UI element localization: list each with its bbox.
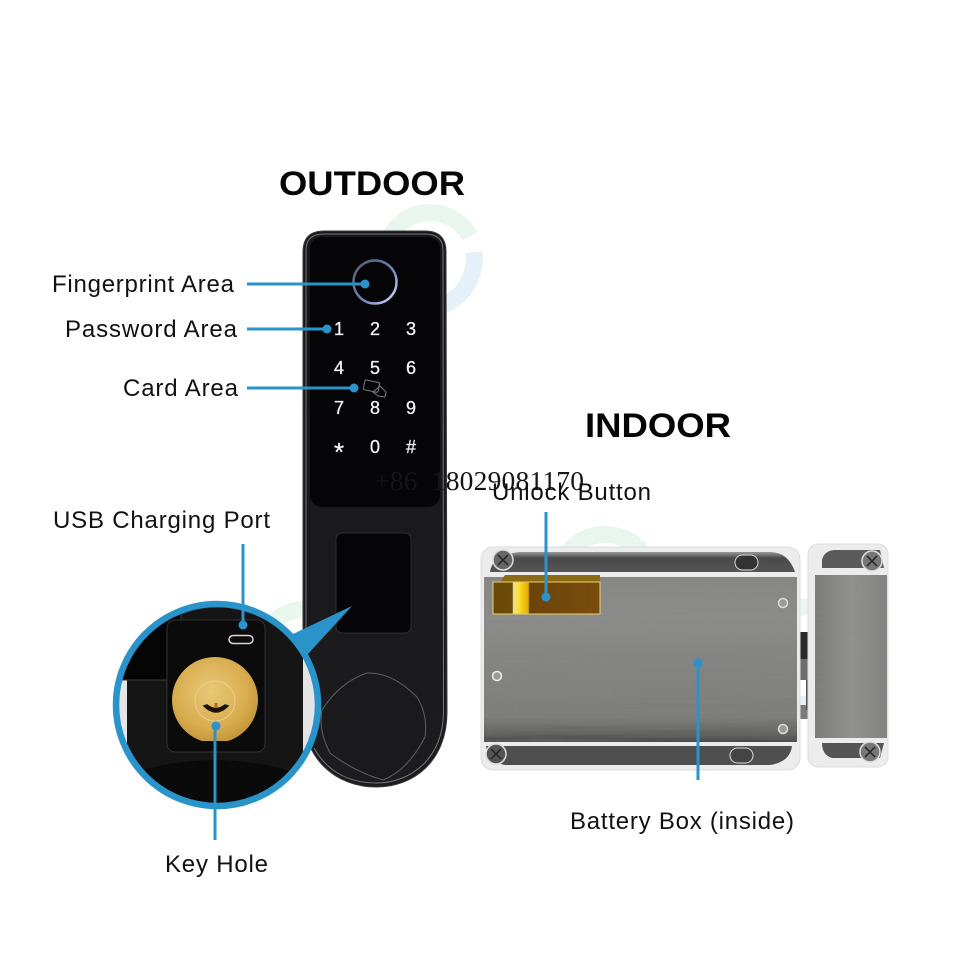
keypad digits: 9 <box>406 398 416 418</box>
callout: fingerprint area: Fingerprint Area <box>52 271 235 298</box>
outdoor handle lock <box>303 231 447 787</box>
touch panel <box>310 237 440 507</box>
keypad digits: 8 <box>370 398 380 418</box>
screws and slots <box>486 550 788 764</box>
keypad digits: 6 <box>406 358 416 378</box>
zoom callout: usb port and key hole <box>110 600 325 810</box>
brushed plate <box>484 577 797 742</box>
callout: password area: Password Area <box>65 316 238 343</box>
handle body <box>303 231 447 787</box>
key slot <box>204 705 228 712</box>
callout: card area <box>123 375 358 402</box>
keypad digits: 0 <box>370 437 380 457</box>
heading: indoor: INDOOR <box>585 407 731 445</box>
callout interior <box>119 607 315 803</box>
keypad digits: 3 <box>406 319 416 339</box>
callout: key hole <box>165 722 268 878</box>
icon: card reader <box>363 380 386 397</box>
callout: battery box: Battery Box (inside) <box>570 808 794 835</box>
fingerprint sensor ring <box>354 260 396 304</box>
zoom callout pointer <box>293 606 352 655</box>
keypad digits: 2 <box>370 319 380 339</box>
callout: password area <box>65 316 332 343</box>
keypad digits: 7 <box>334 398 344 418</box>
top strip <box>490 552 795 572</box>
callout: fingerprint area <box>52 271 370 298</box>
lever recess <box>336 533 411 633</box>
unlock button <box>493 575 600 614</box>
callout: battery box <box>570 658 794 835</box>
callout: unlock button: Unlock Button <box>492 479 651 506</box>
phone number overlay: +86 18029081170 <box>374 465 584 496</box>
callout: card area: Card Area <box>123 375 239 402</box>
keypad digits: 1 <box>334 319 344 339</box>
keypad digits: * <box>334 437 344 467</box>
keypad digits: # <box>406 437 416 457</box>
strike box <box>808 544 888 767</box>
callout ring <box>116 604 318 806</box>
brass key cylinder <box>172 657 258 743</box>
callout: usb charging port: USB Charging Port <box>53 507 270 534</box>
thumb knob <box>321 673 426 780</box>
heading: outdoor: OUTDOOR <box>279 165 465 203</box>
watermark logos <box>270 213 842 704</box>
connecting bolts <box>796 632 810 719</box>
callout: key hole: Key Hole <box>165 851 268 878</box>
callout: usb charging port <box>53 507 270 630</box>
bottom strip <box>486 746 792 765</box>
keypad digits: 5 <box>370 358 380 378</box>
keypad digits <box>334 319 416 467</box>
main case <box>481 547 800 770</box>
callout: unlock button <box>492 479 651 602</box>
keypad digits: 4 <box>334 358 344 378</box>
usb port <box>229 636 253 644</box>
indoor rim lock <box>481 544 888 770</box>
